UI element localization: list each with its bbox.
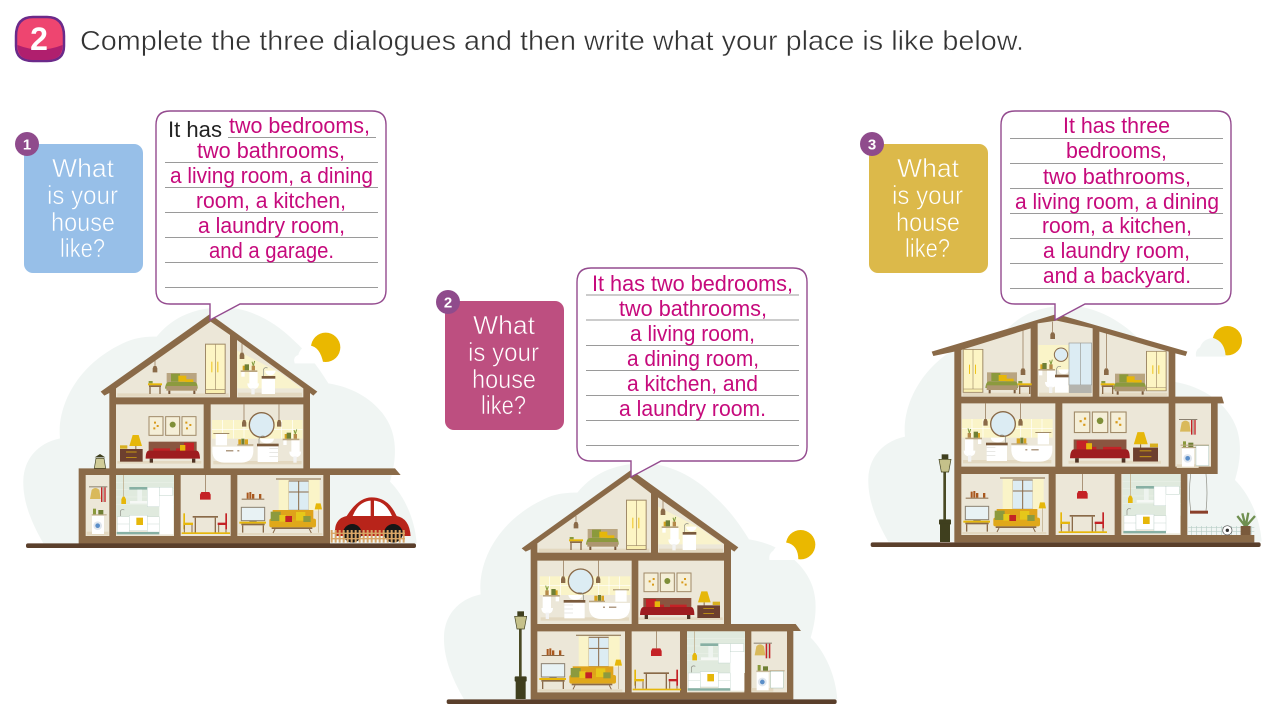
street lamp <box>515 611 527 699</box>
icon: sun and cloud <box>294 333 340 363</box>
dialogue 1: question box: What <box>52 153 115 183</box>
left attic bedroom <box>963 330 1032 394</box>
dialogue 2: answer bubble: a dining room, <box>627 346 759 371</box>
dialogue 3: answer bubble <box>1001 111 1231 320</box>
dialogue 3: question box: What <box>897 153 960 183</box>
badge 3 <box>860 132 884 156</box>
dialogue 1: answer bubble: It has <box>168 117 222 142</box>
dialogue 3: question box: like? <box>905 233 950 263</box>
dialogue 2: answer bubble: It has two bedrooms, <box>592 271 793 296</box>
dialogue 1: question box: is your <box>47 180 118 210</box>
badge 1: 1 <box>23 136 31 154</box>
dialogue 3: answer bubble: bedrooms, <box>1066 138 1167 163</box>
house 2 illustration <box>444 463 837 704</box>
swing <box>1189 474 1208 514</box>
house 1 illustration with garage <box>23 307 417 548</box>
title instruction: Complete the three dialogues and then write what your place is like below. <box>80 25 1024 56</box>
dialogue 2: answer bubble: a laundry room. <box>619 396 766 421</box>
dialogue 2: answer bubble: a kitchen, and <box>627 371 758 396</box>
dialogue 1: answer bubble: room, a kitchen, <box>196 188 346 213</box>
laundry room <box>751 643 785 692</box>
dialogue 3: answer bubble: room, a kitchen, <box>1042 213 1192 238</box>
potted plant <box>1237 513 1255 535</box>
laundry room <box>1177 419 1209 468</box>
dialogue 3: question box: house <box>896 207 960 237</box>
dialogue 2: question box: house <box>472 364 536 394</box>
icon: wall lantern <box>94 454 106 468</box>
dialogue 2: question box: What <box>473 310 536 340</box>
dialogue 2: question box: like? <box>481 390 526 420</box>
dialogue 2: answer bubble: a living room, <box>630 321 755 346</box>
dialogue 3: question box: is your <box>892 180 963 210</box>
dialogue 3: answer bubble: and a backyard. <box>1043 263 1191 288</box>
icon: sun and cloud <box>769 530 815 560</box>
dialogue 1: answer bubble: a living room, a dining <box>170 163 373 188</box>
dialogue 2: question box: is your <box>468 337 539 367</box>
football <box>1223 526 1232 535</box>
dialogue 2: answer bubble: two bathrooms, <box>619 296 767 321</box>
car and fence <box>331 497 411 543</box>
icon: exercise number 2: 2 <box>30 21 48 57</box>
fence <box>1188 526 1254 535</box>
badge 1 <box>15 132 39 156</box>
house 3 illustration with backyard <box>868 306 1262 547</box>
dialogue 1: answer bubble: and a garage. <box>209 238 334 263</box>
dialogue 3: answer bubble: It has three <box>1063 113 1170 138</box>
dialogue 2: question box <box>436 290 564 430</box>
dialogue 3: question box <box>860 132 988 273</box>
dialogue 3: answer bubble: two bathrooms, <box>1043 164 1191 189</box>
icon: exercise number 2 <box>16 17 64 61</box>
dialogue 1: answer bubble: two bathrooms, <box>197 138 345 163</box>
badge 2: 2 <box>444 294 452 312</box>
dialogue 3: answer bubble: a laundry room, <box>1043 238 1190 263</box>
street lamp <box>939 454 951 542</box>
badge 3: 3 <box>868 136 876 154</box>
dialogue 1: question box <box>15 132 143 273</box>
dialogue 1: question box: like? <box>60 233 105 263</box>
centre attic bathroom with shower <box>1038 322 1092 393</box>
dialogue 1: answer bubble: a laundry room, <box>198 213 345 238</box>
icon: sun and cloud <box>1196 326 1242 357</box>
dialogue 1: answer bubble: two bedrooms, <box>229 113 370 138</box>
dialogue 3: answer bubble: a living room, a dining <box>1015 189 1219 214</box>
right attic bedroom <box>1101 333 1167 395</box>
dialogue 2: answer bubble <box>577 268 807 477</box>
dialogue 1: answer bubble <box>156 111 386 320</box>
dialogue 1: question box: house <box>51 207 115 237</box>
